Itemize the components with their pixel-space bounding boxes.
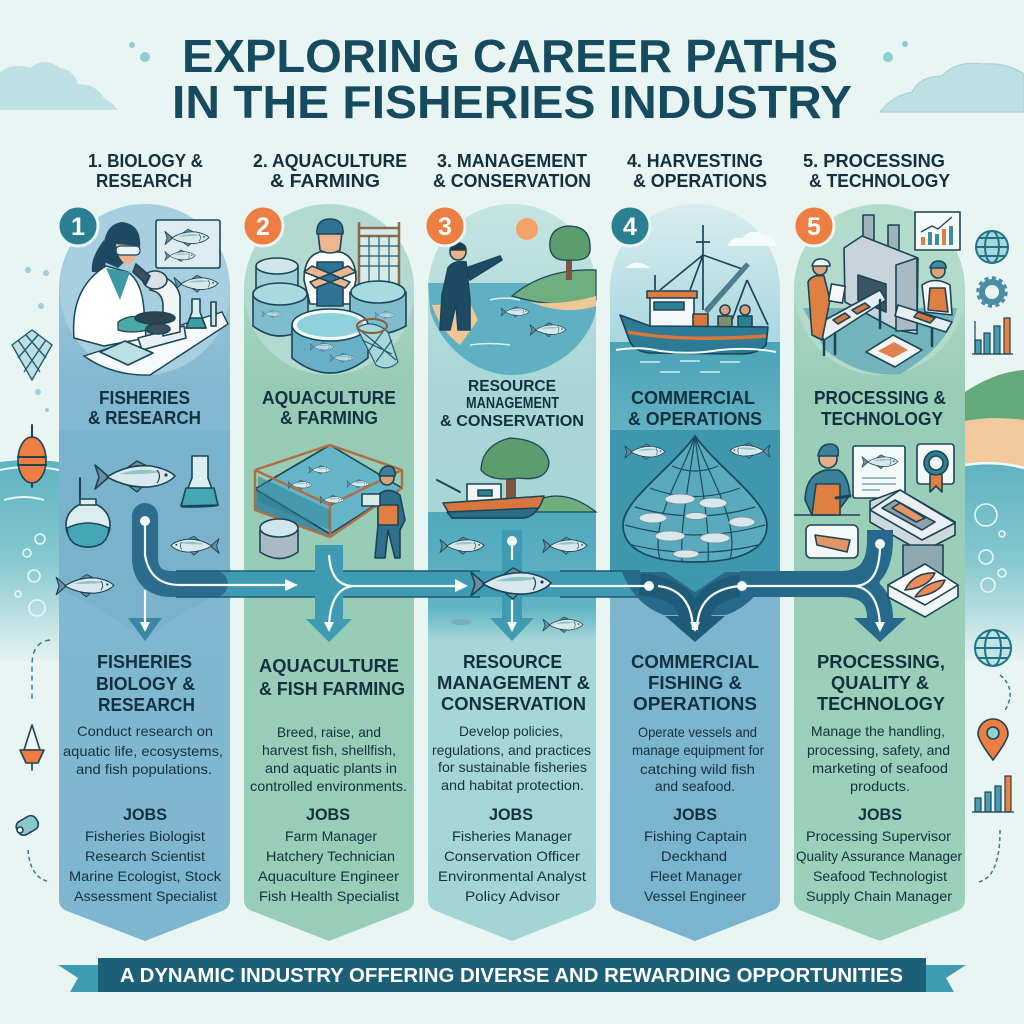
jobs list column 1: Assessment Specialist: [74, 888, 217, 904]
sea: [428, 283, 596, 375]
panel subtitles: MANAGEMENT: [466, 395, 559, 412]
bottom banner: [58, 958, 966, 992]
column headings: 1. BIOLOGY &: [88, 151, 203, 171]
tree: [481, 438, 549, 504]
jobs list column 3: Fisheries Manager: [452, 828, 572, 844]
description column 4: manage equipment for: [632, 742, 764, 758]
tray of salmon: [888, 564, 958, 617]
face: [116, 244, 139, 265]
fish on wall: [174, 275, 218, 292]
icon: gear: [978, 278, 1006, 306]
bubbles upper left: [25, 267, 49, 412]
description column 1: Conduct research on: [77, 723, 213, 739]
jobs list column 5: JOBS: [858, 805, 902, 824]
panel: column 1: [59, 204, 230, 941]
number badges: [58, 206, 834, 246]
badge 2: [243, 206, 283, 246]
cloud top right: [880, 63, 1024, 112]
main flow band: [145, 520, 880, 584]
water details: [501, 306, 529, 317]
chart board: [915, 212, 960, 250]
worker with clipboard: [362, 466, 405, 558]
title: [172, 30, 852, 128]
bubbles right: [975, 504, 1006, 592]
description column 3: for sustainable fisheries: [438, 759, 587, 775]
column headings: & FARMING: [270, 171, 380, 191]
description column 5: processing, safety, and: [807, 742, 950, 758]
decorative dots near title: [129, 41, 908, 62]
fish at left of flow: [56, 574, 114, 597]
illustration: processing plant: [795, 205, 965, 375]
jobs list column 5: Seafood Technologist: [813, 868, 947, 884]
lower heading column 1: FISHERIES: [97, 652, 192, 672]
icon: marker float: [20, 725, 44, 770]
jobs list column 5: [796, 805, 962, 904]
left tank: [253, 294, 308, 336]
description column 2: [250, 724, 407, 794]
dashed arrow left upper: [32, 640, 50, 700]
column headings: & OPERATIONS: [633, 171, 767, 191]
lower heading column 3: [437, 652, 590, 714]
lower heading column 3: CONSERVATION: [441, 694, 586, 714]
jobs list column 2: JOBS: [306, 805, 350, 824]
jobs list column 4: [644, 805, 747, 904]
water: [428, 512, 596, 640]
panel subtitles: TECHNOLOGY: [821, 409, 943, 429]
jobs list column 4: JOBS: [673, 805, 717, 824]
lower heading column 1: [96, 652, 195, 715]
lower heading column 1: BIOLOGY &: [96, 674, 195, 694]
title: IN THE FISHERIES INDUSTRY: [172, 76, 852, 128]
lower heading column 5: TECHNOLOGY: [817, 694, 945, 714]
central fish on flow: [471, 568, 551, 599]
rigging: [655, 225, 768, 325]
description column 2: Breed, raise, and: [277, 724, 381, 740]
panel subtitles: & OPERATIONS: [628, 409, 762, 429]
mid illustration: net pen and worker: [255, 445, 405, 558]
column headings: 3. MANAGEMENT: [437, 151, 587, 171]
mid illustration: quality worker and products: [794, 444, 955, 575]
jobs list column 5: Quality Assurance Manager: [796, 848, 962, 864]
machine: [844, 215, 918, 334]
machine box: [870, 490, 955, 575]
lower heading column 4: COMMERCIAL: [631, 652, 759, 672]
lower heading column 4: [631, 652, 759, 714]
badge 5: [794, 206, 834, 246]
panel: column 4: [610, 204, 780, 941]
bucket: [260, 530, 298, 558]
picture frame: [156, 220, 220, 268]
conical flask: [181, 456, 218, 507]
jobs list column 4: Fleet Manager: [650, 868, 742, 884]
packaged tray: [866, 335, 922, 367]
column 5 dark flows: [740, 584, 880, 618]
lower heading column 4: FISHING &: [648, 673, 742, 693]
panel: column 5: [794, 204, 965, 941]
lower heading column 3: RESOURCE: [463, 652, 562, 672]
column headings: 2. AQUACULTURE: [253, 151, 407, 171]
column headings: RESEARCH: [96, 171, 192, 191]
illustration: scientist at microscope: [60, 205, 230, 375]
sea: [610, 342, 780, 432]
panel subtitles: PROCESSING &: [814, 388, 946, 408]
description column 3: Develop policies,: [459, 723, 563, 739]
panel subtitles: & FARMING: [280, 408, 378, 428]
badge 3: 3: [438, 213, 452, 241]
jobs list column 2: Farm Manager: [285, 828, 377, 844]
hull: [620, 315, 768, 354]
jobs list column 3: Environmental Analyst: [438, 868, 586, 884]
goggles: [116, 246, 140, 255]
mid illustration: fish and flasks: [59, 430, 230, 640]
jobs list column 2: Hatchery Technician: [266, 848, 395, 864]
jobs list column 1: [69, 805, 222, 904]
badge 1: [58, 206, 98, 246]
jobs list column 1: Research Scientist: [85, 848, 205, 864]
icon: bar chart top: [972, 318, 1013, 354]
round flask: [66, 478, 110, 547]
column headings: & TECHNOLOGY: [809, 171, 950, 191]
jobs list column 3: Policy Advisor: [465, 888, 560, 904]
flow arrows connecting columns: [128, 516, 906, 642]
lower heading column 5: PROCESSING,: [817, 652, 945, 672]
water band left: [0, 460, 59, 660]
description column 1: [63, 723, 223, 777]
jobs list column 3: JOBS: [489, 805, 533, 824]
description column 1: and fish populations.: [76, 761, 212, 777]
icon: globe bottom: [975, 630, 1011, 666]
jobs list column 2: Aquaculture Engineer: [258, 868, 399, 884]
tablet: [100, 341, 153, 365]
down stub column 2: [315, 545, 343, 625]
sun: [516, 218, 538, 240]
bench: [84, 312, 228, 375]
panel: column 2: [244, 204, 414, 941]
panel subtitles: RESOURCE: [468, 378, 556, 395]
waves left: [0, 467, 59, 500]
description column 2: controlled environments.: [250, 778, 407, 794]
badge 5: 5: [807, 213, 821, 241]
jobs list column 4: Vessel Engineer: [644, 888, 746, 904]
mid illustration: trawl net with catch: [610, 430, 780, 572]
packaged fillet left: [806, 525, 858, 558]
belts: [816, 290, 952, 355]
worker: [805, 444, 850, 515]
hand net: [357, 319, 398, 368]
band dark edges: [176, 571, 660, 597]
description column 5: marketing of seafood: [812, 760, 948, 776]
down arrow column 1: [128, 618, 162, 641]
small shadow fish: [451, 619, 471, 625]
wave right: [965, 463, 1024, 468]
lower heading column 2: AQUACULTURE: [259, 656, 399, 676]
description column 5: Manage the handling,: [811, 723, 945, 739]
dashed arrow right lower: [978, 830, 1000, 882]
dashed arrow right upper: [1000, 675, 1010, 712]
hair: [103, 222, 140, 268]
panel subtitles: AQUACULTURE: [262, 388, 396, 408]
badge 1: 1: [71, 213, 85, 241]
crew: [718, 305, 752, 332]
report sheet: [853, 446, 905, 498]
description column 2: and aquatic plants in: [265, 760, 397, 776]
dashed arrow left lower: [28, 850, 50, 882]
jobs list column 5: Supply Chain Manager: [806, 888, 952, 904]
description column 4: [632, 724, 764, 794]
jobs list column 3: [438, 805, 586, 904]
net frame: [359, 222, 399, 285]
lower heading column 1: RESEARCH: [98, 695, 195, 715]
column 4 dark flows: [622, 572, 770, 615]
bottom banner: A DYNAMIC INDUSTRY OFFERING DIVERSE AND REWARDING OPPORTUNITIES: [120, 965, 903, 987]
lower heading column 2: & FISH FARMING: [259, 679, 405, 699]
glove: [118, 316, 150, 332]
description column 3: regulations, and practices: [432, 742, 591, 758]
waves: [616, 348, 776, 353]
lower heading column 3: MANAGEMENT &: [437, 673, 590, 693]
wheelhouse: [647, 291, 708, 331]
panel subtitles: & CONSERVATION: [440, 413, 584, 430]
sand right: [965, 418, 1024, 468]
hill right: [965, 370, 1024, 421]
right tank: [350, 292, 406, 334]
island: [512, 270, 596, 304]
icon: globe top: [976, 231, 1008, 263]
back tank: [256, 266, 298, 303]
jobs list column 3: Conservation Officer: [444, 848, 580, 864]
column headings: 4. HARVESTING: [627, 151, 763, 171]
cloud top left: [0, 62, 118, 110]
lower heading column 4: OPERATIONS: [633, 694, 757, 714]
down stub column 3: [502, 530, 522, 622]
white flow lines: [145, 521, 880, 630]
lower heading column 2: [259, 656, 405, 699]
jobs list column 2: Fish Health Specialist: [259, 888, 399, 904]
farmer: [304, 219, 356, 306]
column headings: 5. PROCESSING: [803, 151, 945, 171]
illustration: resource manager on coast: [428, 218, 596, 375]
certificate: [917, 444, 954, 492]
jobs list column 4: Fishing Captain: [644, 828, 747, 844]
panel subtitles: FISHERIES: [99, 388, 190, 408]
column headings: [88, 151, 950, 191]
clouds: [626, 232, 776, 268]
description column 2: harvest fish, shellfish,: [262, 742, 396, 758]
column headings: & CONSERVATION: [433, 171, 591, 191]
badge 4: [610, 206, 650, 246]
icon: orange buoy: [18, 425, 46, 487]
icon: tag: [14, 813, 41, 837]
description column 4: and seafood.: [655, 778, 735, 794]
description column 3: and habitat protection.: [441, 777, 584, 793]
description column 4: Operate vessels and: [638, 724, 757, 740]
illustration: aquaculture farmer and tanks: [244, 205, 414, 375]
description column 5: products.: [850, 778, 910, 794]
worker left: [808, 259, 845, 340]
description column 4: catching wild fish: [640, 761, 755, 777]
left side decoration: [0, 62, 118, 882]
hill: [520, 496, 596, 512]
flask and tube: [186, 299, 216, 328]
description column 5: [807, 723, 950, 794]
panel subtitles: [88, 378, 946, 430]
mid illustration: patrol boat and tree: [428, 438, 596, 640]
jobs list column 2: [258, 805, 399, 904]
front tank: [292, 325, 368, 373]
badge 2: 2: [256, 213, 270, 241]
description column 1: aquatic life, ecosystems,: [63, 743, 223, 759]
jobs list column 1: Fisheries Biologist: [85, 828, 205, 844]
tree: [550, 226, 590, 280]
description column 3: [432, 723, 591, 793]
badge 4: 4: [623, 213, 637, 241]
arrowheads white: [140, 516, 885, 632]
panel: column 3: [428, 204, 596, 941]
jobs list column 4: Deckhand: [661, 848, 727, 864]
icon: map pin: [978, 719, 1008, 760]
jobs list column 5: Processing Supervisor: [806, 828, 951, 844]
coat: [74, 266, 146, 346]
icon: bar chart bottom: [972, 776, 1014, 812]
icon: net left: [12, 330, 52, 380]
panel subtitles: & RESEARCH: [88, 408, 201, 428]
lower heading column 5: QUALITY &: [831, 673, 929, 693]
panel subtitles: COMMERCIAL: [631, 388, 755, 408]
lower heading column 5: [817, 652, 945, 714]
illustration: fishing boat: [610, 225, 780, 432]
boat: [437, 480, 544, 518]
title: EXPLORING CAREER PATHS: [182, 30, 838, 82]
badge 3: [425, 206, 465, 246]
water band right: [965, 463, 1024, 660]
jobs list column 1: Marine Ecologist, Stock: [69, 868, 222, 884]
bubbles left: [15, 534, 45, 616]
jobs list column 1: JOBS: [123, 805, 167, 824]
worker right: [922, 261, 952, 315]
man in suit: [440, 243, 502, 330]
right side decoration: [880, 63, 1024, 882]
sand left: [432, 303, 478, 345]
microscope: [133, 264, 186, 350]
